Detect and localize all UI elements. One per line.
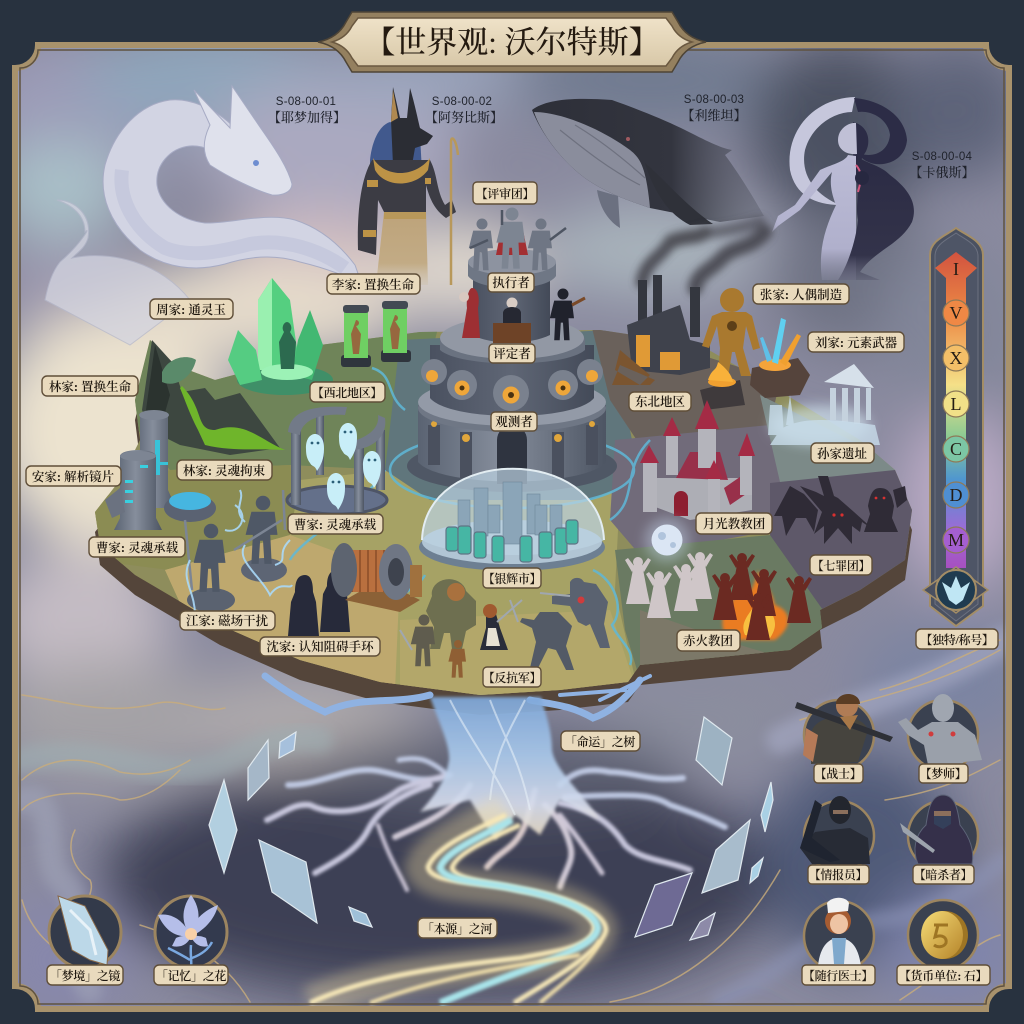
label: 【暗杀者】: [914, 867, 972, 882]
label: Anubis: 【阿努比斯】: [425, 110, 503, 125]
seven sins demons: [774, 476, 907, 544]
red fire cult: [712, 553, 812, 640]
label: [26, 466, 121, 486]
ritual: lightning statues: [185, 490, 292, 615]
dark smoke: [642, 222, 765, 288]
icon: stone coin: [908, 900, 978, 970]
label: 执行者: [492, 275, 530, 290]
ritual: soul cage: [287, 407, 387, 514]
ritual: analysis towers: [105, 410, 216, 530]
ritual: poison mountain: [142, 340, 285, 455]
label: 李家: 置换生命: [332, 277, 415, 292]
rank bar: M: [948, 530, 964, 550]
rank bar: C: [950, 439, 962, 459]
ritual: green crystal shrine: [228, 278, 333, 395]
label: [154, 965, 228, 985]
island rivers: [290, 368, 650, 665]
label: [753, 284, 849, 304]
label: [310, 382, 385, 402]
label: 「梦境」之镜: [50, 968, 120, 983]
creature: Leviathan whale: [532, 99, 764, 228]
label: [916, 629, 998, 649]
gauge emblem: [923, 567, 988, 613]
portrait: warrior: [795, 694, 893, 770]
label: 【战士】: [815, 766, 861, 781]
rank gauge: [923, 228, 988, 626]
label: [288, 514, 383, 534]
label: 刘家: 元素武器: [815, 335, 898, 350]
label: [89, 537, 185, 557]
rank bar: L: [950, 394, 962, 414]
label: 「命运」之树: [565, 734, 635, 749]
label: [327, 274, 420, 294]
label: Leviathan: S-08-00-03: [684, 94, 744, 106]
label: Jormungandr: 【耶梦加得】: [268, 110, 346, 125]
label: 孙家遗址: [817, 446, 867, 461]
label: 【货币单位: 石】: [899, 968, 987, 983]
goddess pale side: [772, 155, 856, 280]
label: 「记忆」之花: [156, 968, 226, 983]
label: 江家: 磁场干扰: [186, 613, 269, 628]
creature: lower serpent coil: [45, 200, 190, 345]
label: 林家: 置换生命: [49, 379, 132, 394]
label: [561, 731, 640, 751]
portrait: field medic: [804, 898, 874, 971]
portrait: intelligence agent: [800, 796, 874, 871]
goddess dark side: [838, 156, 914, 280]
island regions: [95, 330, 912, 695]
label: 周家: 通灵玉: [156, 302, 226, 317]
tree of fate: [265, 676, 725, 890]
label: Jormungandr: S-08-00-01: [276, 96, 336, 108]
label: [260, 637, 380, 656]
observer eyes: [421, 359, 603, 411]
creature: Anubis: [358, 87, 458, 285]
observation tower: [407, 208, 617, 492]
label: [629, 392, 691, 411]
label: [418, 918, 497, 938]
island cliff: [95, 350, 912, 715]
floating memory shards: [209, 717, 773, 940]
silver city dome: [419, 469, 605, 571]
label: [180, 611, 275, 630]
label: 【梦师】: [920, 766, 966, 781]
label: [802, 965, 875, 985]
moon orb: [645, 518, 689, 562]
ritual: life-swap tubes: [341, 301, 411, 367]
label: [150, 299, 233, 319]
label: [177, 460, 272, 480]
icon: memory flower: [155, 895, 227, 968]
portrait: dream master android: [898, 694, 982, 770]
label: 曹家: 灵魂承载: [294, 517, 377, 532]
label: 【情报员】: [809, 867, 867, 882]
label: 张家: 人偶制造: [760, 287, 843, 302]
moonlight castle: [640, 400, 755, 520]
label: 【七罪团】: [812, 558, 870, 573]
judges: [459, 288, 585, 343]
label: Chaos: S-08-00-04: [912, 151, 973, 163]
island: [80, 320, 930, 720]
rank bar: V: [950, 303, 962, 323]
Sun family ruins: [768, 364, 880, 445]
label: 赤火教团: [683, 633, 733, 648]
label: [677, 630, 740, 651]
label: 【反抗军】: [483, 670, 541, 685]
white robed cultists: [625, 552, 713, 618]
golem: [702, 288, 760, 378]
label: Chaos: 【卡俄斯】: [909, 165, 975, 180]
forges and elemental swords: [700, 318, 810, 410]
label: 东北地区: [635, 394, 685, 409]
label: Anubis: S-08-00-02: [432, 96, 492, 108]
label: [42, 376, 138, 396]
label: 月光教教团: [703, 516, 765, 531]
label: [489, 344, 535, 363]
icon: dream mirror: [49, 896, 121, 968]
label: [810, 555, 872, 575]
factory: [612, 275, 710, 385]
ritual: magnetic coil: [331, 543, 422, 612]
label: 评定者: [493, 346, 531, 361]
label: Leviathan: [681, 94, 747, 123]
label: 【西北地区】: [312, 385, 382, 400]
rank bar: I: [953, 259, 959, 279]
label: 观测者: [495, 414, 533, 429]
label: 曹家: 灵魂承载: [96, 540, 179, 555]
label: 沈家: 认知阻碍手环: [266, 639, 375, 654]
label: 【随行医士】: [803, 968, 873, 983]
label: [897, 965, 990, 985]
label: 安家: 解析镜片: [32, 469, 115, 484]
ritual: dark robed pair: [288, 570, 350, 636]
label: Chaos: [909, 151, 975, 180]
rank bar: D: [950, 485, 962, 505]
label: Leviathan: 【利维坦】: [681, 108, 747, 123]
title plaque: 【世界观: 沃尔特斯】: [364, 25, 660, 60]
creature: Jormungandr white dragon: [103, 86, 362, 285]
title plaque: [318, 12, 706, 72]
rank bar: [935, 252, 977, 568]
label: [491, 412, 537, 431]
creature: Chaos goddess: [772, 97, 914, 280]
label: [811, 443, 874, 463]
label: Jormungandr: [268, 96, 346, 125]
rank bar: X: [950, 348, 962, 368]
label: 「本源」之河: [422, 921, 492, 936]
label: 【评审团】: [476, 186, 534, 201]
label: [473, 182, 537, 204]
label: [488, 273, 534, 292]
label: [808, 332, 904, 352]
label: Anubis: [425, 96, 503, 125]
portrait: assassin: [900, 795, 978, 871]
river of origin: [310, 810, 606, 1003]
label: 【独特/称号】: [920, 632, 994, 647]
label: 林家: 灵魂拘束: [183, 463, 266, 478]
label: [47, 965, 123, 985]
rebel army: [400, 578, 610, 678]
label: [696, 513, 772, 534]
executors: [469, 208, 566, 270]
label: 【银辉市】: [483, 571, 541, 586]
